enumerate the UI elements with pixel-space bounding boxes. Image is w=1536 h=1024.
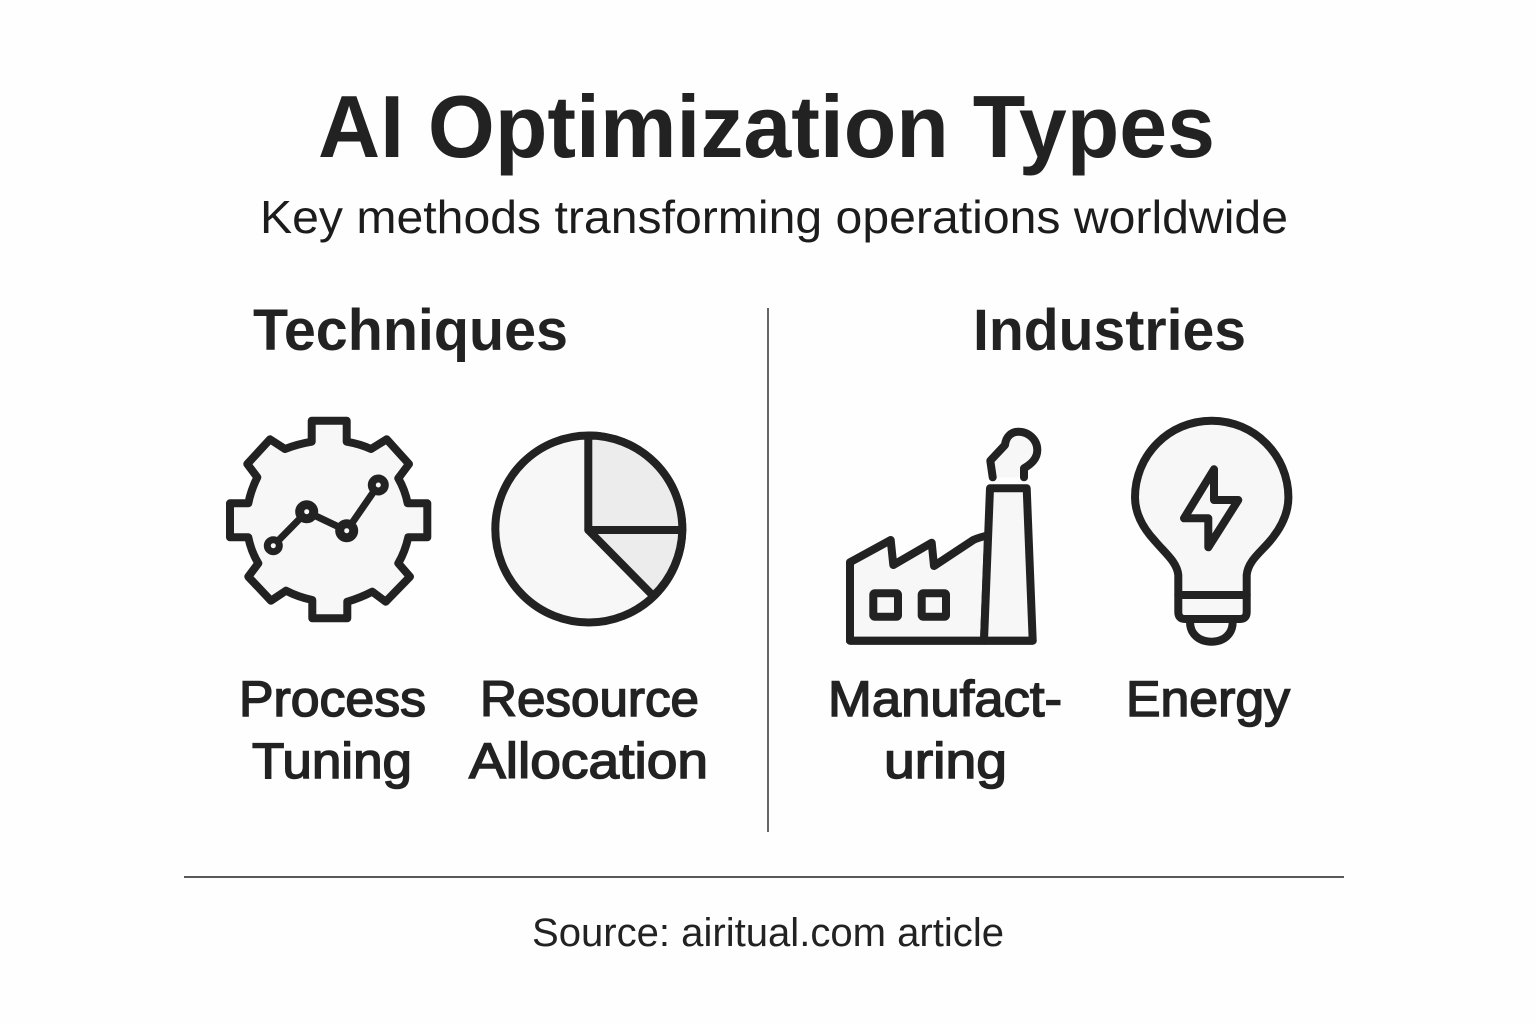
- label: energy: Energy: [1126, 671, 1290, 727]
- icon: factory: [850, 432, 1037, 641]
- icon: gear with line chart: [230, 421, 427, 618]
- label: manufacturing: [828, 671, 1062, 789]
- heading: techniques: Techniques: [253, 298, 568, 363]
- label: resource allocation: [469, 671, 708, 789]
- label: process tuning: Tuning: [252, 733, 412, 789]
- icon: pie chart: [495, 435, 682, 622]
- subtitle: Key methods transforming operations worldwide: [260, 191, 1288, 243]
- icon: light bulb: [1135, 421, 1288, 642]
- label: process tuning: Process: [239, 671, 426, 727]
- label: process tuning: [239, 671, 426, 789]
- label: manufacturing: uring: [884, 733, 1007, 789]
- source note: Source: airitual.com article: [532, 911, 1004, 955]
- label: manufacturing: Manufact-: [828, 671, 1062, 727]
- label: resource allocation: Resource: [480, 671, 699, 727]
- footer divider: [184, 876, 1344, 878]
- title: AI Optimization Types: [318, 77, 1215, 176]
- heading: industries: Industries: [973, 298, 1246, 363]
- center divider: [767, 308, 769, 832]
- label: resource allocation: Allocation: [469, 733, 708, 789]
